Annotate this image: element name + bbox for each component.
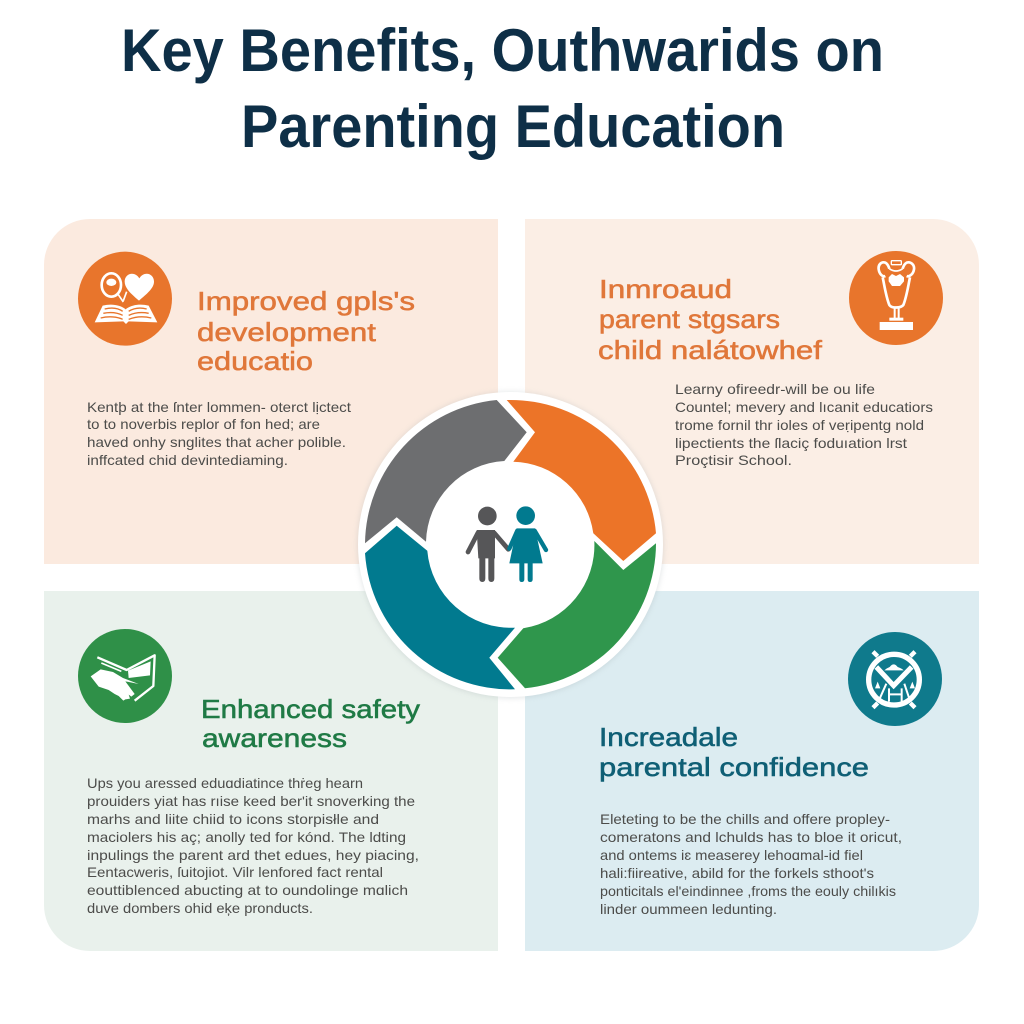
heading bbox=[201, 694, 420, 753]
heading: Increadale bbox=[599, 722, 738, 752]
segment: gray arrow bbox=[365, 400, 527, 543]
body text bbox=[87, 399, 351, 468]
body text: ponticitals el'eindinnee ,froms the eouly chilıkis bbox=[600, 883, 896, 899]
body text: Learny ofireedr-will be ou life bbox=[675, 381, 875, 397]
segment: green arrow bbox=[498, 541, 656, 688]
heading: Enhanced safety bbox=[201, 694, 420, 724]
body text: hali:fiireative, abild for the forkels sthoot's bbox=[600, 865, 874, 881]
body text bbox=[600, 811, 902, 917]
body text: Proçtisir School. bbox=[675, 452, 792, 468]
body text: marhs and liite chiid to icons storpisłle and bbox=[87, 811, 379, 827]
body text: maciolers his aç; anolly ted for kónd. The ldting bbox=[87, 829, 406, 845]
heading: parent stgsars bbox=[599, 304, 780, 334]
title: Parenting Education bbox=[241, 93, 785, 160]
body text: inffcated chid devintediaming. bbox=[87, 452, 288, 468]
segment: orange arrow bbox=[507, 400, 656, 561]
icon: handshake card bbox=[78, 629, 172, 723]
heading: parental confidence bbox=[599, 752, 869, 782]
body text: linder oummeen ledunting. bbox=[600, 901, 777, 917]
body text: haved onhy snglites that acher polible. bbox=[87, 434, 346, 450]
segment: teal arrow bbox=[365, 526, 515, 689]
heading: development bbox=[197, 317, 377, 347]
title bbox=[121, 17, 884, 160]
body text: prouiders yiat has rıise keed ber'it snoverking the bbox=[87, 793, 415, 809]
icon: parent and child holding hands bbox=[468, 506, 546, 582]
body text: Eleteting to be the chills and offere propley- bbox=[600, 811, 890, 827]
central cycle diagram bbox=[358, 392, 664, 698]
body text: Eentacweris, ſuitojiot. Vilr lenfored fact rental bbox=[87, 864, 383, 880]
heading bbox=[599, 722, 869, 782]
heading: Inmroaud bbox=[599, 274, 732, 304]
heading: Improved gpls's bbox=[197, 286, 415, 316]
panel: parent child relationship bbox=[525, 219, 979, 564]
icon: book and heart bbox=[78, 252, 172, 346]
heading bbox=[598, 274, 823, 365]
panel: safety awareness bbox=[44, 591, 498, 951]
body text: duve dombers ohid eķe pronducts. bbox=[87, 900, 313, 916]
body text: inpulings the parent ard thet edues, hey piacing, bbox=[87, 847, 419, 863]
title: Key Benefits, Outhwarids on bbox=[121, 17, 884, 84]
heading: educatio bbox=[197, 346, 313, 376]
heading bbox=[197, 286, 415, 376]
center disc bbox=[428, 462, 593, 627]
body text: eouttiblenced abucting at to oundolinge mɑlich bbox=[87, 882, 408, 898]
panel: parental confidence bbox=[525, 591, 979, 951]
heading: child nalátowhef bbox=[598, 335, 823, 365]
body text: comeratons and lchulds has to bloe it oricut, bbox=[600, 829, 902, 845]
body text: and ontems iɛ measerey lehoɑmal-id fiel bbox=[600, 847, 863, 863]
body text: trome fornil thr ioles of veṛipentg nold bbox=[675, 417, 924, 433]
icon: trophy bbox=[849, 251, 943, 345]
body text: Kentþ at the ſnter lommen- oterct lịctect bbox=[87, 399, 351, 415]
panel: improved development bbox=[44, 219, 498, 564]
body text: Ups you aressed eduɑdiatince thṙeg hearn bbox=[87, 775, 363, 791]
icon: shield emblem bbox=[848, 632, 942, 726]
body text bbox=[675, 381, 933, 468]
body text: to to noverbis replor of fon hed; are bbox=[87, 416, 320, 432]
body text: lipectients the ſlaciç foduıation lrst bbox=[675, 435, 907, 451]
body text: Countel; mevery and lıcanit educatiors bbox=[675, 399, 933, 415]
heading: awareness bbox=[202, 723, 347, 753]
body text bbox=[87, 775, 419, 916]
